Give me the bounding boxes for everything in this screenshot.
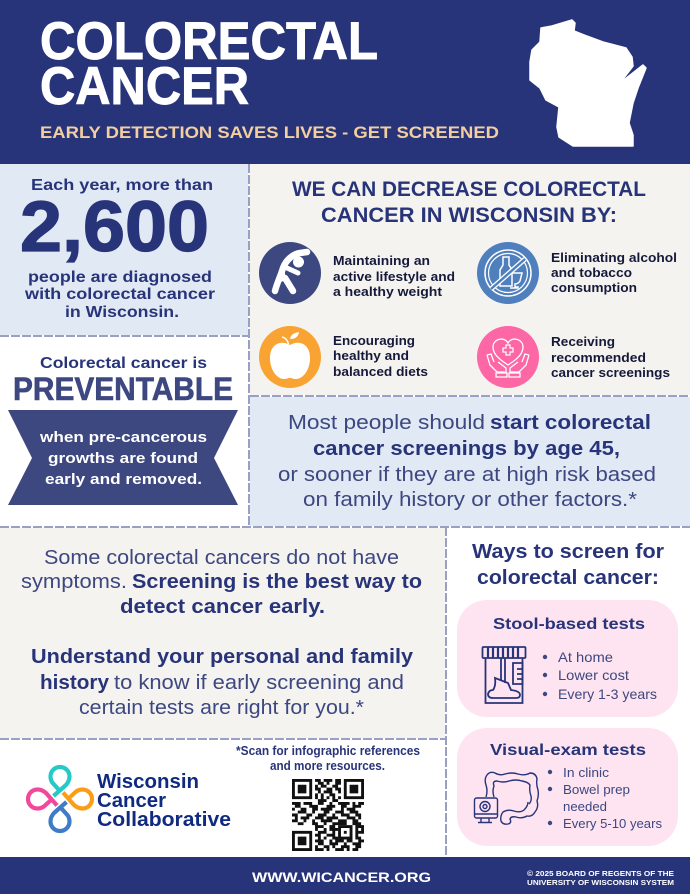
panel: symptoms and family history xyxy=(0,528,445,738)
panel: symptoms and family history: to know if early screening and xyxy=(114,672,404,694)
item: cancer screenings xyxy=(551,335,670,380)
item: cancer screenings: cancer screenings xyxy=(551,366,670,380)
heading: WE CAN DECREASE COLORECTAL xyxy=(292,178,646,201)
icon: colon and monitor xyxy=(474,772,538,824)
panel: screening age xyxy=(250,397,690,526)
scan note xyxy=(236,744,420,773)
panel: symptoms and family history: Understand your personal and family xyxy=(31,646,414,668)
icon: no alcohol xyxy=(477,242,539,304)
panel: preventable xyxy=(8,355,238,505)
copyright: © 2025 BOARD OF REGENTS OF THE xyxy=(527,869,674,878)
ribbon banner xyxy=(8,410,238,505)
card: visual-exam tests: Visual-exam tests xyxy=(490,742,646,759)
panel: preventable: Colorectal cancer is xyxy=(40,355,207,372)
panel: symptoms and family history: certain tests are right for you.* xyxy=(79,697,364,719)
card: stool-based tests: Stool-based tests xyxy=(493,616,645,633)
panel: yearly diagnoses xyxy=(0,164,248,335)
heading: preventable: PREVENTABLE xyxy=(13,371,233,407)
panel: symptoms and family history: Screening is the best way to xyxy=(132,571,422,593)
heading: ways to screen xyxy=(472,541,664,589)
heading: CANCER IN WISCONSIN BY: xyxy=(321,204,617,227)
logo: Wisconsin Cancer Collaborative: Collaborative xyxy=(97,809,231,831)
icon: Wisconsin state map xyxy=(530,20,646,146)
item: healthy diets xyxy=(333,334,428,379)
item: cancer screenings: Receiving xyxy=(551,335,615,349)
item: healthy diets: balanced diets xyxy=(333,365,428,379)
item: alcohol and tobacco: consumption xyxy=(551,281,637,295)
ribbon banner: growths are found xyxy=(48,451,198,467)
scan note: *Scan for infographic references xyxy=(236,744,420,758)
panel: screening age: on family history or other factors.* xyxy=(303,489,637,511)
big number: 2,600 xyxy=(20,188,209,267)
heading: ways to screen: Ways to screen for xyxy=(472,541,664,563)
list: At home xyxy=(558,649,613,665)
panel: yearly diagnoses: in Wisconsin. xyxy=(65,304,179,321)
icon: active stretching figure xyxy=(259,242,321,304)
scan note: and more resources. xyxy=(270,759,385,773)
panel: screening age: or sooner if they are at high risk based xyxy=(278,464,656,486)
QR code xyxy=(292,779,364,851)
list: Bowel prep xyxy=(563,782,630,797)
card: stool-based tests xyxy=(457,600,678,717)
panel: yearly diagnoses: Each year, more than xyxy=(31,177,213,194)
item: healthy diets: healthy and xyxy=(333,349,409,363)
title: COLORECTAL xyxy=(40,12,378,71)
item: healthy diets: Encouraging xyxy=(333,334,415,348)
list xyxy=(543,649,657,702)
panel: ways to decrease xyxy=(250,164,690,395)
list: needed xyxy=(563,799,607,814)
panel: screening age: start colorectal xyxy=(490,412,651,434)
website: WWW.WICANCER.ORG xyxy=(252,869,431,885)
list: Every 5-10 years xyxy=(563,816,662,831)
panel: screening age: Most people should xyxy=(288,412,485,434)
panel: symptoms and family history: detect cancer early. xyxy=(120,596,325,618)
heading xyxy=(292,178,646,227)
panel: screening age: cancer screenings by age 45, xyxy=(313,438,620,460)
tagline: EARLY DETECTION SAVES LIVES - GET SCREENED xyxy=(40,124,499,142)
title: CANCER xyxy=(40,57,249,116)
panel: symptoms and family history: symptoms. xyxy=(21,571,127,593)
item: active lifestyle: a healthy weight xyxy=(333,285,443,299)
logo: Wisconsin Cancer Collaborative: Wisconsin xyxy=(97,771,199,793)
item: active lifestyle xyxy=(333,254,455,299)
panel: symptoms and family history: Some colorectal cancers do not have xyxy=(44,547,399,569)
card: visual-exam tests xyxy=(457,728,678,846)
item: cancer screenings: recommended xyxy=(551,351,646,365)
copyright: UNIVERSITY OF WISCONSIN SYSTEM xyxy=(527,878,674,887)
header banner xyxy=(0,0,690,164)
icon: sample jar xyxy=(482,647,526,703)
item: alcohol and tobacco: and tobacco xyxy=(551,266,632,280)
logo: Wisconsin Cancer Collaborative xyxy=(28,767,231,831)
ribbon banner: when pre-cancerous xyxy=(39,430,207,446)
copyright xyxy=(527,869,674,887)
item: alcohol and tobacco: Eliminating alcohol xyxy=(551,251,677,265)
panel: symptoms and family history: history xyxy=(40,672,110,694)
list xyxy=(548,765,662,831)
footer bar xyxy=(0,857,690,894)
icon: hands holding heart xyxy=(477,326,539,388)
heading: ways to screen: colorectal cancer: xyxy=(477,567,659,589)
icon: apple xyxy=(259,326,321,388)
list: In clinic xyxy=(563,765,610,780)
list: Lower cost xyxy=(558,667,629,683)
panel: yearly diagnoses: with colorectal cancer xyxy=(24,286,215,303)
panel: yearly diagnoses: people are diagnosed xyxy=(28,269,212,286)
logo: Wisconsin Cancer Collaborative: Cancer xyxy=(97,790,166,812)
ribbon banner: early and removed. xyxy=(45,472,202,488)
title xyxy=(40,12,378,116)
item: active lifestyle: Maintaining an xyxy=(333,254,430,268)
list: Every 1-3 years xyxy=(558,686,657,702)
item: active lifestyle: active lifestyle and xyxy=(333,270,455,284)
item: alcohol and tobacco xyxy=(551,251,677,295)
